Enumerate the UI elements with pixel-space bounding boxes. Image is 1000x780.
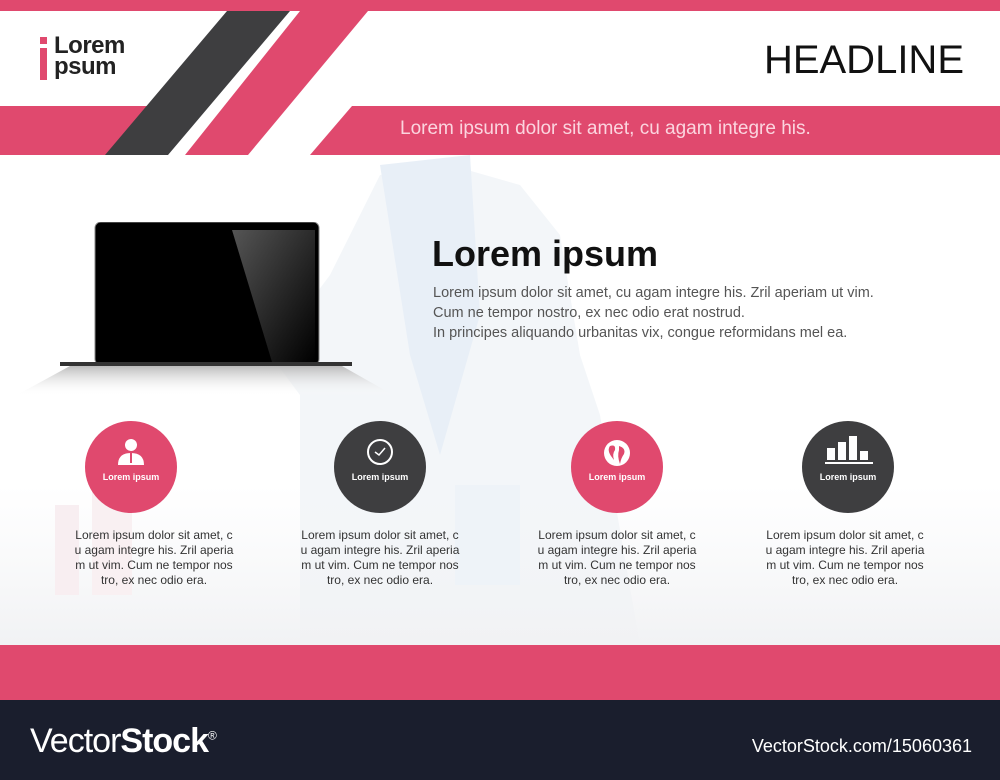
item 2: Lorem ipsum dolor sit amet, c	[301, 528, 459, 542]
item 2: m ut vim. Cum ne tempor nos	[301, 558, 459, 572]
bottom band	[0, 645, 1000, 700]
logo	[40, 32, 125, 80]
footer: VectorStock.com/15060361	[752, 736, 972, 756]
item 2: u agam integre his. Zril aperia	[301, 543, 459, 557]
item 1: tro, ex nec odio era.	[101, 573, 207, 587]
item 3: u agam integre his. Zril aperia	[538, 543, 696, 557]
item 4	[766, 421, 924, 587]
item 1: Lorem ipsum	[103, 472, 159, 482]
main paragraph: Cum ne tempor nostro, ex nec odio erat nostrud.	[433, 305, 745, 321]
laptop	[35, 222, 373, 386]
item 1: Lorem ipsum dolor sit amet, c	[75, 528, 233, 542]
logo: psum	[54, 53, 116, 80]
footer	[0, 700, 1000, 780]
main heading: Lorem ipsum	[432, 233, 658, 274]
item 4: Lorem ipsum	[820, 472, 876, 482]
subtitle: Lorem ipsum dolor sit amet, cu agam integre his.	[400, 118, 811, 139]
item 2: Lorem ipsum	[352, 472, 408, 482]
top bar	[0, 0, 1000, 11]
item 1: u agam integre his. Zril aperia	[75, 543, 233, 557]
item 3	[538, 421, 696, 587]
main paragraph	[433, 285, 874, 341]
item 2	[301, 421, 460, 587]
item 1: m ut vim. Cum ne tempor nos	[75, 558, 233, 572]
item 2: tro, ex nec odio era.	[327, 573, 433, 587]
item 3: m ut vim. Cum ne tempor nos	[538, 558, 696, 572]
background silhouette	[0, 155, 1000, 645]
item 3: Lorem ipsum	[589, 472, 645, 482]
logo: Lorem	[54, 32, 125, 59]
item 3: tro, ex nec odio era.	[564, 573, 670, 587]
main paragraph: Lorem ipsum dolor sit amet, cu agam integre his. Zril aperiam ut vim.	[433, 285, 874, 301]
item 4: m ut vim. Cum ne tempor nos	[766, 558, 924, 572]
header stripes	[0, 11, 1000, 155]
item 1	[75, 421, 234, 587]
item 4: Lorem ipsum dolor sit amet, c	[766, 528, 924, 542]
main paragraph: In principes aliquando urbanitas vix, congue reformidans mel ea.	[433, 325, 847, 341]
footer: VectorStock®	[30, 722, 216, 760]
headline: HEADLINE	[764, 38, 964, 82]
item 4: u agam integre his. Zril aperia	[766, 543, 924, 557]
item 4: tro, ex nec odio era.	[792, 573, 898, 587]
item 3: Lorem ipsum dolor sit amet, c	[538, 528, 696, 542]
